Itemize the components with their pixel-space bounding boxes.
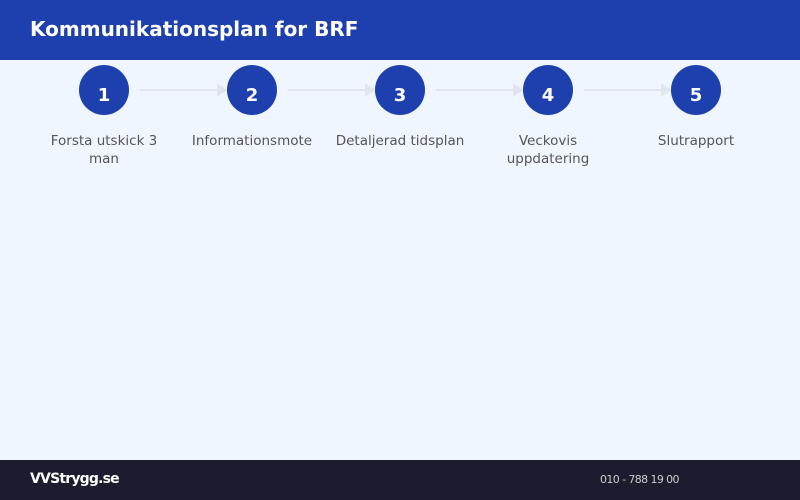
label 2: Informationsmote	[192, 133, 312, 149]
footer	[0, 460, 800, 500]
arrows	[140, 84, 671, 96]
step 4	[523, 65, 573, 115]
phone: 010 - 788 19 00	[600, 473, 679, 486]
title: Kommunikationsplan for BRF	[30, 17, 358, 41]
step 4: 4	[542, 85, 554, 106]
step 5	[671, 65, 721, 115]
label 5: Slutrapport	[658, 133, 734, 149]
label 3: Detaljerad tidsplan	[336, 133, 464, 149]
label 1: Forsta utskick 3 man	[51, 133, 157, 167]
step 3	[375, 65, 425, 115]
step 1: 1	[98, 85, 110, 106]
label 4: Veckovis uppdatering	[507, 133, 589, 167]
step 3: 3	[394, 85, 406, 106]
step 2: 2	[246, 85, 258, 106]
brand: VVStrygg.se	[30, 471, 119, 487]
step 2	[227, 65, 277, 115]
header	[0, 0, 800, 60]
step 1	[79, 65, 129, 115]
step 5: 5	[690, 85, 702, 106]
